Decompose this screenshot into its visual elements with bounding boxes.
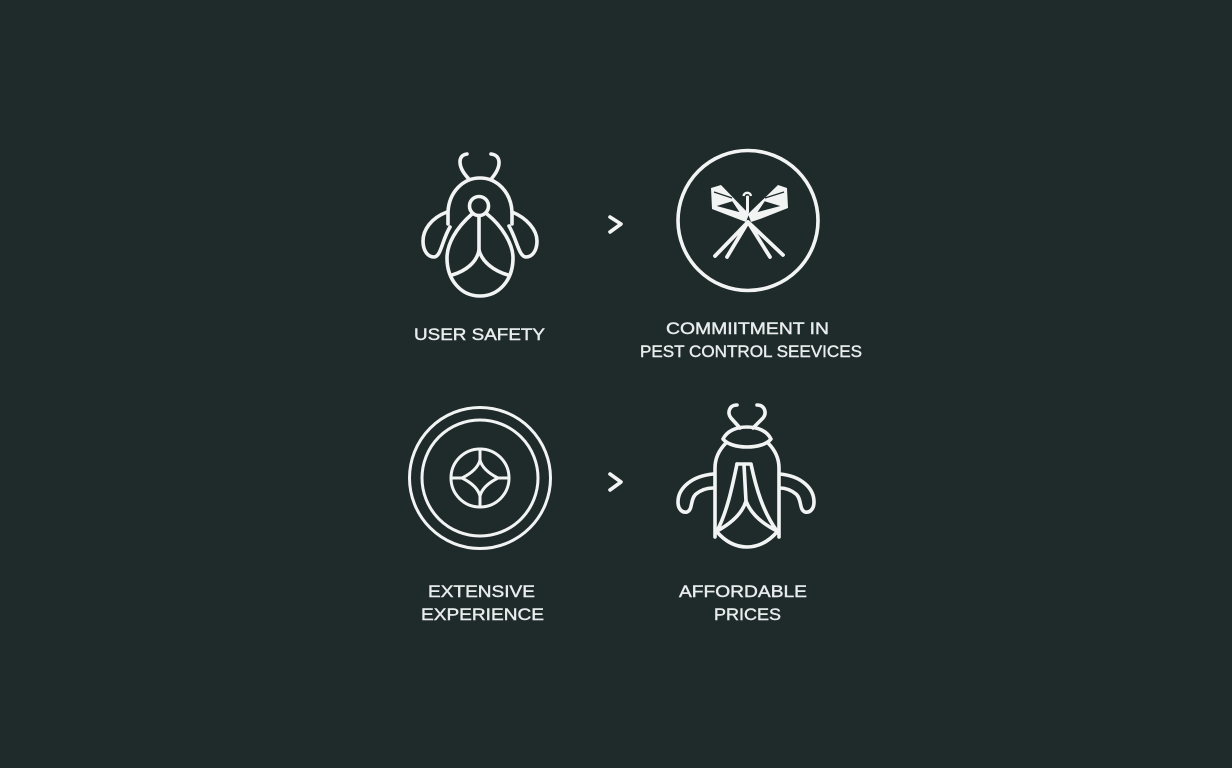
small head	[744, 193, 751, 196]
item: affordable prices	[678, 405, 814, 624]
label: commitment: COMMIITMENT IN	[666, 320, 829, 338]
label: affordable prices: PRICES	[714, 606, 781, 624]
label: affordable prices	[679, 583, 807, 624]
right wing	[748, 185, 788, 222]
label: extensive experience: EXPERIENCE	[421, 606, 544, 624]
label: extensive experience: EXTENSIVE	[428, 583, 535, 601]
label: extensive experience	[421, 583, 544, 624]
arrow: top row	[610, 217, 621, 232]
icon: concentric circles with diamond	[410, 408, 550, 548]
item: user safety	[414, 154, 545, 344]
icon: long beetle	[678, 405, 814, 547]
icon: crossed wings in circle	[678, 150, 818, 290]
label: commitment: PEST CONTROL SEEVICES	[640, 343, 862, 361]
left wing	[711, 185, 749, 222]
label: user safety: USER SAFETY	[414, 326, 545, 344]
wing slits	[714, 192, 784, 211]
label: commitment	[640, 320, 862, 361]
arrow: bottom row	[610, 474, 621, 490]
stem	[746, 197, 749, 212]
item: extensive experience	[410, 408, 550, 624]
item: commitment	[640, 150, 862, 361]
label: affordable prices: AFFORDABLE	[679, 583, 807, 601]
icon: beetle with rounded wings	[423, 154, 537, 296]
crossed sticks	[715, 222, 783, 257]
